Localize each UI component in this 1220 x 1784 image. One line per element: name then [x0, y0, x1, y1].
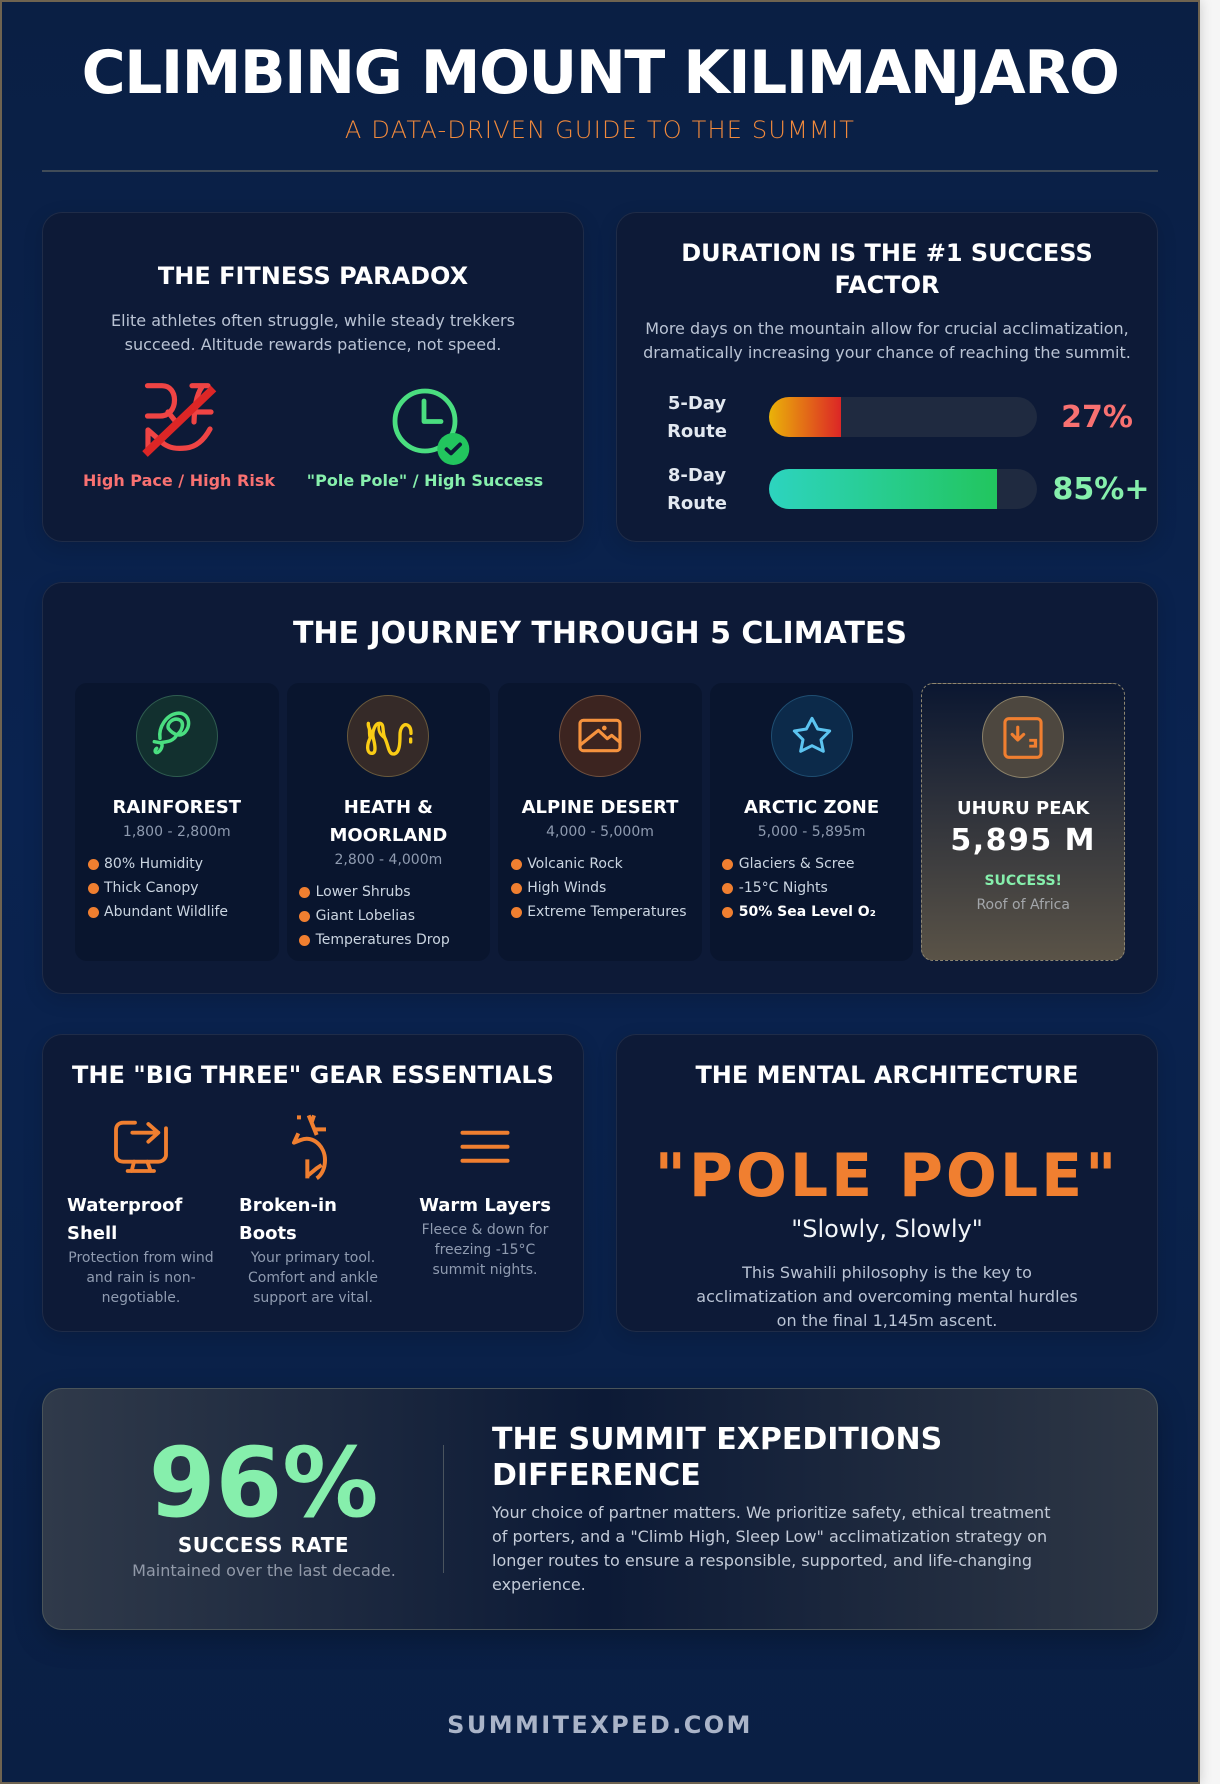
label: roof of africa: Roof of Africa	[976, 897, 1070, 913]
text: waterproof shell	[67, 1195, 182, 1244]
elevation: arctic zone: 5,000 - 5,895m	[758, 824, 865, 840]
translation: slowly slowly: "Slowly, Slowly"	[791, 1215, 983, 1243]
list: rainforest facts: Thick Canopy	[104, 880, 199, 896]
label: 8-day route	[667, 465, 727, 514]
text: waterproof shell: Waterproof	[67, 1195, 182, 1216]
bar: 85 percent	[769, 469, 1037, 509]
list: heath facts: Lower Shrubs	[316, 884, 411, 900]
label: 5-day route: Route	[667, 421, 727, 442]
label: success: SUCCESS!	[984, 873, 1062, 889]
heading: the summit expeditions difference: DIFFERENCE	[492, 1458, 701, 1493]
label: 5-day route	[667, 393, 727, 442]
list: alpine facts: Volcanic Rock	[527, 856, 623, 872]
name: heath and moorland: HEATH &	[344, 797, 433, 818]
heading: duration is the #1 success factor: DURATION IS THE #1 SUCCESS	[681, 239, 1093, 267]
heading: the fitness paradox: THE FITNESS PARADOX	[158, 262, 468, 290]
panel: mental architecture	[616, 1034, 1158, 1332]
text: swahili philosophy	[696, 1263, 1078, 1330]
heading: duration is the #1 success factor	[681, 239, 1093, 299]
panel: journey through 5 climates	[42, 582, 1158, 994]
text: warm layers: Warm Layers	[419, 1195, 551, 1216]
bar chart: 5-day route	[667, 393, 1133, 442]
text: waterproof shell: Shell	[67, 1223, 117, 1244]
list: alpine facts	[511, 856, 687, 920]
icon: high pace crossed out	[142, 383, 216, 457]
icon: clock with check	[392, 388, 470, 465]
list: heath facts	[299, 884, 450, 948]
value: 27%: 27%	[1061, 400, 1133, 435]
text: partner description: of porters, and a "Climb High, Sleep Low" acclimatization strategy on	[492, 1527, 1047, 1546]
heading: the big three gear essentials: THE "BIG THREE" GEAR ESSENTIALS	[72, 1060, 554, 1088]
text: fitness paradox description: succeed. Altitude rewards patience, not speed.	[125, 335, 501, 354]
list: rainforest facts: Abundant Wildlife	[104, 904, 228, 920]
label: 8-day route: Route	[667, 493, 727, 514]
text: partner description: longer routes to ensure a responsible, supported, and life-changing	[492, 1551, 1032, 1570]
elevation: heath: 2,800 - 4,000m	[335, 852, 442, 868]
text: warm layers description: Fleece & down for	[422, 1222, 548, 1238]
list: heath facts: Giant Lobelias	[316, 908, 415, 924]
icon: alpine picture	[559, 695, 641, 777]
heading: duration is the #1 success factor: FACTOR	[834, 271, 940, 299]
list: heath facts: Temperatures Drop	[316, 932, 450, 948]
panel: the fitness paradox	[42, 212, 584, 542]
heading: the summit expeditions difference	[492, 1422, 942, 1493]
list: rainforest facts: 80% Humidity	[104, 856, 203, 872]
text: waterproof shell description: negotiable.	[102, 1290, 180, 1306]
elevation: rainforest: 1,800 - 2,800m	[123, 824, 231, 840]
panel: big three gear essentials	[42, 1034, 584, 1332]
text: broken-in boots: Boots	[239, 1223, 297, 1244]
text: broken-in boots: Broken-in	[239, 1195, 337, 1216]
text: partner description: experience.	[492, 1575, 586, 1594]
elevation: 5,895 m: 5,895 M	[950, 823, 1096, 858]
text: fitness paradox description	[111, 311, 515, 354]
name: uhuru peak: UHURU PEAK	[957, 798, 1089, 819]
heading: the mental architecture: THE MENTAL ARCHITECTURE	[695, 1061, 1079, 1089]
climate card: uhuru peak	[921, 683, 1125, 961]
name: arctic zone: ARCTIC ZONE	[744, 797, 879, 818]
label: 8-day route: 8-Day	[668, 465, 726, 486]
text: swahili philosophy: on the final 1,145m ascent.	[777, 1311, 997, 1330]
list: alpine facts: High Winds	[527, 880, 606, 896]
title: CLIMBING MOUNT KILIMANJARO	[82, 38, 1118, 108]
text: boots description	[248, 1250, 378, 1306]
text: waterproof shell description: Protection from wind	[68, 1250, 214, 1266]
list: arctic facts	[722, 856, 876, 920]
icon: heath squiggle	[347, 695, 429, 777]
footer: website: SUMMITEXPED.COM	[447, 1711, 753, 1739]
name: heath and moorland	[329, 797, 447, 846]
label: high pace high risk: High Pace / High Risk	[83, 471, 275, 490]
callout: pole pole: "POLE POLE"	[655, 1141, 1119, 1211]
heading: the summit expeditions difference: THE SUMMIT EXPEDITIONS	[492, 1422, 942, 1457]
text: warm layers description: freezing -15°C	[435, 1242, 535, 1258]
list: arctic facts: 50% Sea Level O₂	[739, 904, 876, 920]
heading: the journey through 5 climates: THE JOURNEY THROUGH 5 CLIMATES	[293, 616, 907, 651]
text: maintained over the last decade: Maintained over the last decade.	[132, 1561, 396, 1580]
label: pole pole high success: "Pole Pole" / High Success	[307, 471, 543, 490]
elevation: alpine desert: 4,000 - 5,000m	[546, 824, 654, 840]
panel: summit expeditions difference	[42, 1388, 1158, 1630]
text: boots description: Comfort and ankle	[248, 1270, 378, 1286]
panel: duration success factor	[616, 212, 1158, 542]
text: boots description: Your primary tool.	[251, 1250, 375, 1266]
name: alpine desert: ALPINE DESERT	[522, 797, 678, 818]
text: waterproof shell description	[68, 1250, 214, 1306]
climate card: alpine desert	[498, 683, 702, 961]
text: duration description: dramatically increasing your chance of reaching the summit.	[643, 343, 1131, 362]
text: fitness paradox description: Elite athletes often struggle, while steady trekkers	[111, 311, 515, 330]
bar chart: 8-day route	[667, 465, 1149, 514]
list: alpine facts: Extreme Temperatures	[527, 904, 687, 920]
value: 85%+: 85%+	[1053, 472, 1149, 507]
name: heath and moorland: MOORLAND	[329, 825, 447, 846]
subtitle: A DATA-DRIVEN GUIDE TO THE SUMMIT	[345, 116, 855, 144]
text: broken-in boots	[239, 1195, 337, 1244]
text: warm layers description: summit nights.	[432, 1262, 538, 1278]
climate card: rainforest	[75, 683, 279, 961]
icon: arctic star	[771, 695, 853, 777]
list: arctic facts: Glaciers & Scree	[739, 856, 854, 872]
text: warm layers description	[422, 1222, 548, 1278]
text: duration description: More days on the mountain allow for crucial acclimatization,	[645, 319, 1129, 338]
name: rainforest: RAINFOREST	[113, 797, 241, 818]
text: partner description: Your choice of partner matters. We prioritize safety, ethical treatment	[492, 1503, 1050, 1522]
stat: 96%: 96%	[149, 1427, 378, 1539]
text: boots description: support are vital.	[253, 1290, 373, 1306]
text: swahili philosophy: acclimatization and overcoming mental hurdles	[696, 1287, 1078, 1306]
icon: rainforest leaf	[136, 695, 218, 777]
bar: 27 percent	[769, 397, 1037, 437]
climate card: heath and moorland	[287, 683, 490, 961]
text: waterproof shell description: and rain is non-	[86, 1270, 196, 1286]
icon: warm layers	[460, 1130, 510, 1163]
text: duration description	[643, 319, 1131, 362]
label: success rate: SUCCESS RATE	[178, 1533, 349, 1557]
text: swahili philosophy: This Swahili philosophy is the key to	[742, 1263, 1032, 1282]
label: 5-day route: 5-Day	[668, 393, 726, 414]
icon: waterproof shell	[114, 1120, 168, 1173]
climate card: arctic zone	[710, 683, 913, 961]
text: partner description	[492, 1503, 1050, 1594]
list: rainforest facts	[88, 856, 228, 920]
icon: broken-in boots	[292, 1114, 327, 1180]
icon: uhuru peak summit	[982, 696, 1064, 778]
list: arctic facts: -15°C Nights	[739, 880, 828, 896]
